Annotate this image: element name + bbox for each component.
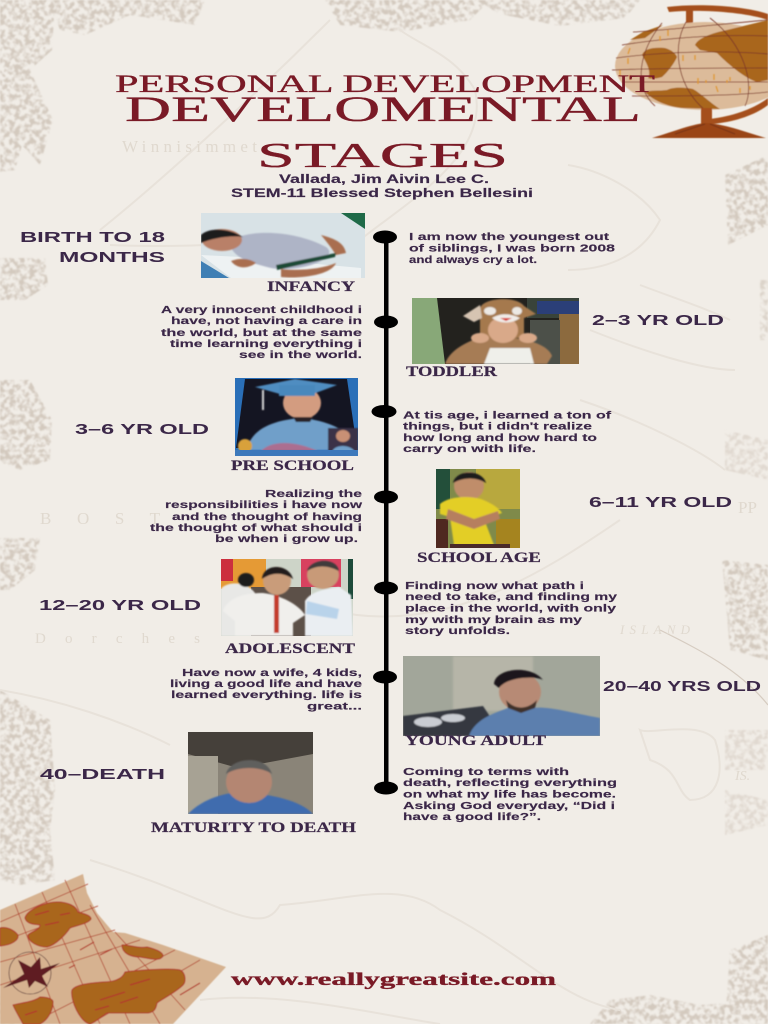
title: personal development: PERSONAL DEVELOPMENT <box>115 71 655 98</box>
description: adolescent: place in the world, with only <box>405 602 616 614</box>
description: maturity to death: death, reflecting everything <box>403 777 617 789</box>
description: toddler: A very innocent childhood i <box>161 304 362 316</box>
age label: 2-3 yr old: 2–3 YR OLD <box>592 312 724 329</box>
description: school age: Realizing the <box>265 488 362 500</box>
description: young adult: living a good life and have <box>170 678 362 690</box>
photo: older man selfie <box>188 732 313 814</box>
description: toddler <box>161 304 362 361</box>
age label: 20-40 yrs old: 20–40 YRS OLD <box>603 678 761 695</box>
website url: www.reallygreatsite.com <box>231 969 556 989</box>
photo: graduation portrait <box>235 378 358 456</box>
description: pre school: things, but i didn't realize <box>403 420 592 432</box>
stage: young adult <box>170 656 761 749</box>
stage name: maturity to death: MATURITY TO DEATH <box>151 820 357 836</box>
faded map place names: Winnisimmet <box>122 137 257 156</box>
age label: birth to 18 months: MONTHS <box>59 249 165 266</box>
faded map place names: D o r c h e s <box>35 631 200 647</box>
photo: young adult selfie <box>403 656 600 736</box>
description: adolescent: my with my brain as my <box>405 614 582 626</box>
faded map place names: ISLAND <box>619 622 691 637</box>
stage name: school age: SCHOOL AGE <box>417 550 541 566</box>
description: young adult: learned everything. life is <box>171 689 362 701</box>
icon: treasure map <box>0 874 226 1024</box>
description: infancy: and always cry a lot. <box>409 254 537 266</box>
stage name: toddler: TODDLER <box>406 364 498 380</box>
stage name: infancy: INFANCY <box>267 279 356 295</box>
title: developmental: DEVELOMENTAL <box>125 89 641 129</box>
description: infancy: of siblings, I was born 2008 <box>409 242 615 254</box>
photo: boy in yellow shirt <box>436 469 520 548</box>
stage: infancy <box>20 213 615 295</box>
description: adolescent <box>405 580 617 637</box>
description: school age: be when i grow up. <box>215 533 358 545</box>
description: school age: and the thought of having <box>172 511 362 523</box>
photo: toddler in bear costume <box>412 298 579 364</box>
description: maturity to death <box>403 766 617 823</box>
description: toddler: the world, but at the same <box>161 327 362 339</box>
description: maturity to death: on what my life has become. <box>403 788 616 800</box>
photo: sleeping baby <box>201 213 365 278</box>
description: pre school: carry on with life. <box>403 443 536 455</box>
age label: 6-11 yr old: 6–11 YR OLD <box>589 494 732 511</box>
faded map place names: B O S T <box>40 509 161 528</box>
author name: Vallada, Jim Aivin Lee C. <box>279 172 489 186</box>
description: pre school: At tis age, i learned a ton of <box>403 410 612 422</box>
photo: teen with father <box>221 559 353 636</box>
description: pre school <box>403 410 612 455</box>
stage: maturity to death <box>40 732 617 836</box>
stage: pre school <box>75 378 612 474</box>
age label: birth to 18 months <box>20 229 165 266</box>
stage: school age <box>150 469 732 566</box>
faded map place names: PP <box>738 498 757 517</box>
description: school age <box>150 488 363 545</box>
description: adolescent: story unfolds. <box>405 625 510 637</box>
description: maturity to death: Coming to terms with <box>403 766 569 778</box>
stage: toddler <box>161 298 724 380</box>
icon: compass rose <box>3 952 60 994</box>
age label: 3-6 yr old: 3–6 YR OLD <box>75 421 209 438</box>
description: toddler: see in the world. <box>239 349 362 361</box>
description: maturity to death: have a good life?”. <box>403 811 541 823</box>
timeline <box>372 230 398 794</box>
description: school age: the thought of what should i <box>150 522 362 534</box>
icon: globe <box>612 5 768 138</box>
title: stages: STAGES <box>257 136 508 175</box>
age label: 12-20 yr old: 12–20 YR OLD <box>39 597 201 614</box>
description: toddler: time learning everything i <box>170 338 362 350</box>
description: school age: responsibilities i have now <box>165 499 363 511</box>
section and school: STEM-11 Blessed Stephen Bellesini <box>231 186 533 200</box>
description: young adult: great... <box>307 700 362 712</box>
faded map place names <box>35 137 757 784</box>
description: maturity to death: Asking God everyday, “Did i <box>403 800 615 812</box>
age label: 40-death: 40–DEATH <box>40 766 165 783</box>
description: infancy: I am now the youngest out <box>409 231 610 243</box>
age label: birth to 18 months: BIRTH TO 18 <box>20 229 165 246</box>
description: infancy <box>409 231 615 266</box>
description: adolescent: need to take, and finding my <box>405 591 617 603</box>
stage name: young adult: YOUNG ADULT <box>405 733 546 749</box>
description: toddler: have, not having a care in <box>171 315 362 327</box>
description: pre school: how long and how hard to <box>403 432 597 444</box>
description: young adult: Have now a wife, 4 kids, <box>182 667 362 679</box>
faded map place names: IS. <box>734 769 750 784</box>
stage name: adolescent: ADOLESCENT <box>225 641 355 657</box>
description: adolescent: Finding now what path i <box>405 580 584 592</box>
stage: adolescent <box>39 559 617 657</box>
stage name: pre school: PRE SCHOOL <box>231 458 354 474</box>
description: young adult <box>170 667 362 712</box>
